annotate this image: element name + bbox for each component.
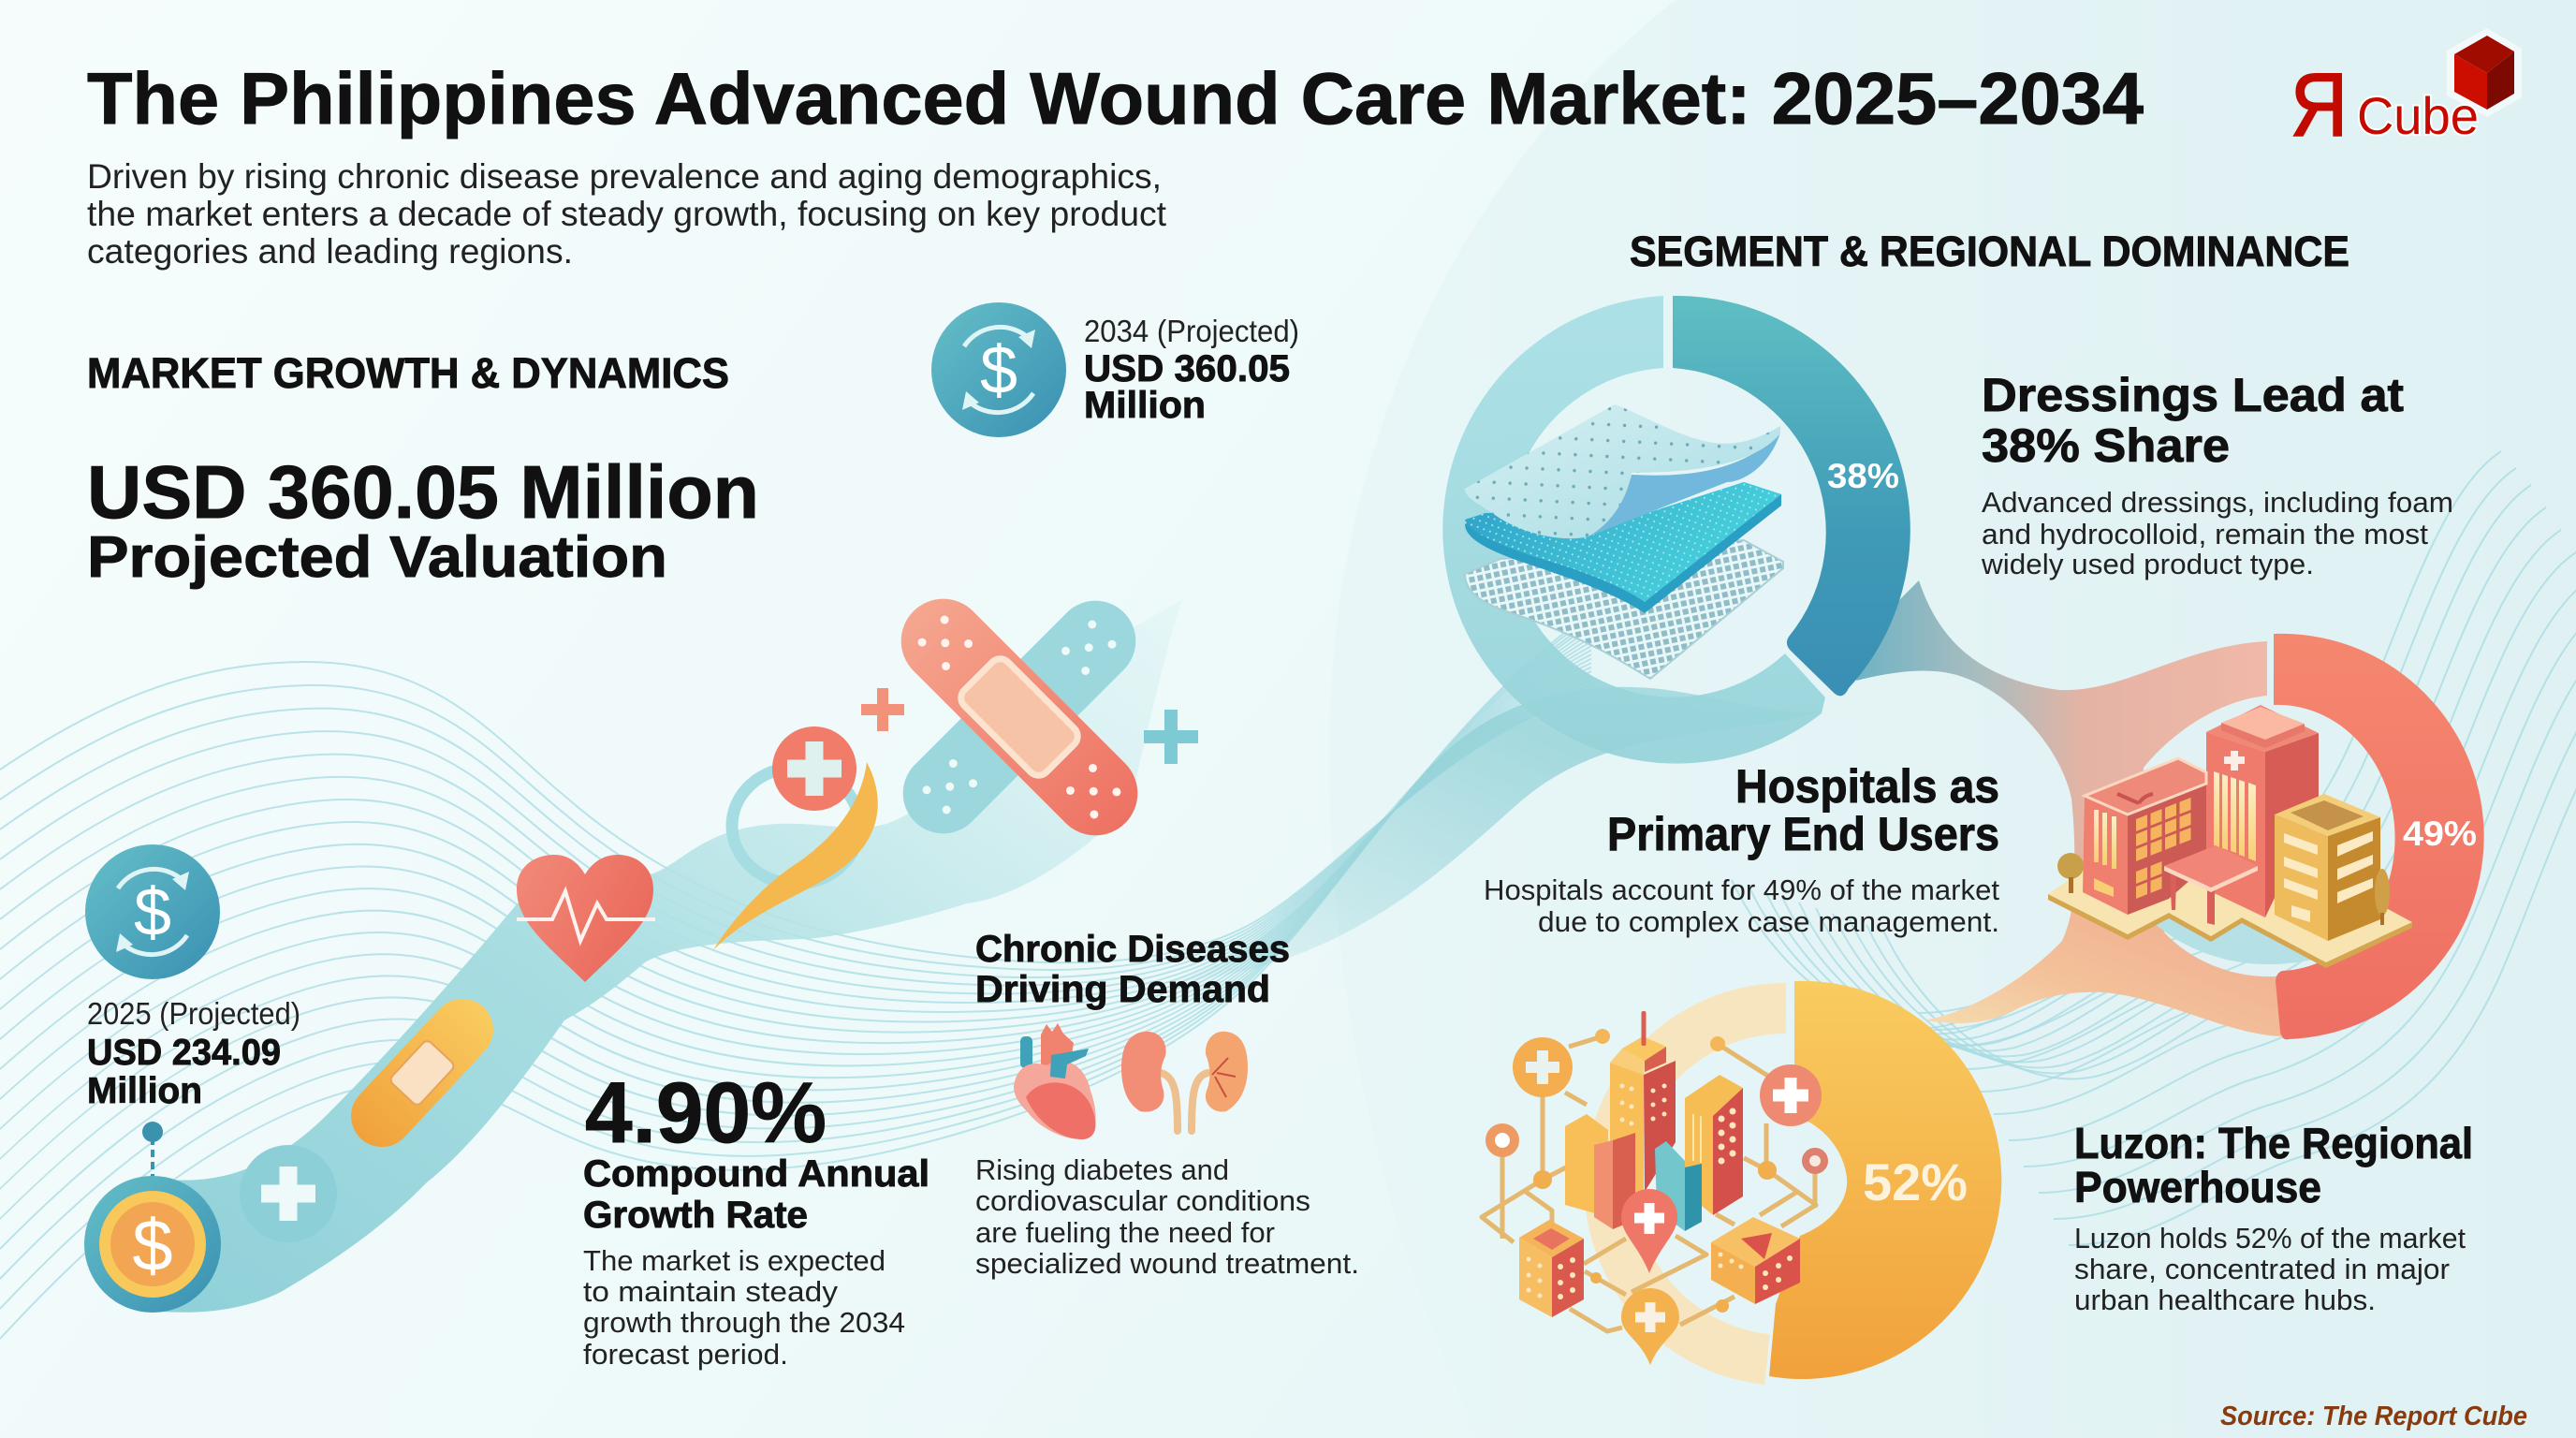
stat: 2034 projected: 2034 (Projected) bbox=[1084, 314, 1299, 348]
stat: 2025 projected: Million bbox=[87, 1071, 202, 1111]
text: chronic disease description: specialized wound treatment. bbox=[975, 1247, 1359, 1280]
chart: dressings 38 percent donut: 38% bbox=[1827, 457, 1899, 495]
icon: gold coin start marker bbox=[84, 1122, 221, 1313]
text: hospitals: Hospitals as bbox=[1735, 760, 1999, 813]
heading: chronic diseases bbox=[975, 929, 1290, 1010]
icon: dollar cycle 2034 bbox=[931, 302, 1066, 437]
icon: crossed bandages bbox=[884, 581, 1155, 853]
text: Luzon: Powerhouse bbox=[2074, 1163, 2321, 1211]
text: dressings: and hydrocolloid, remain the most bbox=[1982, 518, 2428, 550]
heading: chronic diseases: Chronic Diseases bbox=[975, 929, 1290, 970]
growth ribbon bbox=[153, 599, 1182, 1313]
icon: dollar cycle 2025: $ bbox=[134, 875, 171, 950]
text: chronic disease description: Rising diabetes and bbox=[975, 1153, 1229, 1186]
text: chronic disease description: are fueling the need for bbox=[975, 1216, 1275, 1249]
stat: CAGR: Compound Annual bbox=[583, 1153, 929, 1195]
heading: chronic diseases: Driving Demand bbox=[975, 969, 1270, 1010]
ribbon: hospitals to Luzon bbox=[1925, 889, 2281, 1036]
text: hospitals: Primary End Users bbox=[1607, 808, 1999, 860]
icon: kidneys bbox=[1121, 1032, 1248, 1131]
logo: RCube bbox=[2291, 28, 2522, 155]
subtitle text block: the market enters a decade of steady growth, focusing on key product bbox=[87, 195, 1167, 233]
stat: CAGR: forecast period. bbox=[583, 1338, 788, 1371]
chart: hospitals 49 percent donut bbox=[2153, 634, 2484, 1039]
stat: 2034 projected bbox=[1084, 314, 1299, 426]
icon: layered wound dressings bbox=[1465, 404, 1783, 679]
logo: RCube: Cube bbox=[2357, 86, 2479, 145]
text: Luzon: Luzon: The Regional bbox=[2074, 1119, 2473, 1167]
icon: orange plus bbox=[861, 688, 904, 731]
icon: orange leaf swoosh bbox=[713, 762, 878, 950]
source note: Source: The Report Cube bbox=[2220, 1401, 2527, 1431]
text: hospitals bbox=[1484, 760, 1999, 938]
text: dressings: Advanced dressings, including foam bbox=[1982, 486, 2453, 519]
heading: market growth and dynamics: MARKET GROWTH & DYNAMICS bbox=[87, 349, 729, 397]
stat: CAGR: to maintain steady bbox=[583, 1275, 839, 1308]
stat: 2034 projected: Million bbox=[1084, 385, 1206, 426]
icon: plus circle bbox=[240, 1145, 337, 1242]
text: hospitals: due to complex case management. bbox=[1538, 905, 1999, 938]
icon: heart with pulse bbox=[517, 855, 655, 982]
heading: segment and regional dominance: SEGMENT & REGIONAL DOMINANCE bbox=[1630, 227, 2349, 275]
icon: gold coin start marker: $ bbox=[132, 1204, 173, 1286]
stat: CAGR: growth through the 2034 bbox=[583, 1306, 905, 1339]
stat: CAGR: Growth Rate bbox=[583, 1195, 808, 1236]
chart: Luzon 52 percent donut bbox=[1609, 981, 2001, 1379]
ribbon: dressings to hospitals bbox=[1856, 580, 2267, 899]
stat: 2034 projected: USD 360.05 bbox=[1084, 348, 1290, 389]
teal wave into dressings donut bbox=[1161, 687, 1821, 983]
icon: dollar cycle 2034: $ bbox=[980, 333, 1017, 408]
chart: Luzon 52 percent donut: 52% bbox=[1863, 1152, 1968, 1211]
stat: 2025 projected bbox=[87, 996, 300, 1111]
text: Luzon: Luzon holds 52% of the market bbox=[2074, 1222, 2466, 1255]
text: hospitals: Hospitals account for 49% of the market bbox=[1484, 873, 1999, 906]
icon: urban healthcare network bbox=[1482, 1011, 1824, 1365]
icon: dollar cycle 2025 bbox=[85, 844, 220, 979]
text: chronic disease description bbox=[975, 1153, 1359, 1280]
chart: hospitals 49 percent donut: 49% bbox=[2403, 814, 2477, 853]
subtitle text block bbox=[87, 157, 1167, 271]
icon: teal plus bbox=[1144, 710, 1198, 764]
text: dressings: 38% Share bbox=[1982, 419, 2230, 472]
text: dressings: widely used product type. bbox=[1981, 548, 2314, 580]
headline valuation: Projected Valuation bbox=[87, 525, 667, 590]
text: dressings bbox=[1981, 369, 2453, 580]
subtitle text block: Driven by rising chronic disease prevalence and aging demographics, bbox=[87, 157, 1162, 196]
icon: hospital buildings bbox=[2048, 705, 2412, 968]
logo: RCube: Я bbox=[2291, 55, 2348, 155]
icon: human heart organ bbox=[1014, 1023, 1096, 1139]
subtitle text block: categories and leading regions. bbox=[87, 232, 573, 271]
headline valuation: USD 360.05 Million bbox=[87, 450, 759, 534]
stat: CAGR: 4.90% bbox=[585, 1065, 827, 1161]
icon: teal ring and medical cross bbox=[732, 726, 859, 884]
text: Luzon: urban healthcare hubs. bbox=[2074, 1284, 2376, 1316]
headline valuation bbox=[87, 450, 759, 590]
icon: orange bandage bbox=[338, 986, 506, 1160]
title: The Philippines Advanced Wound Care Market: 2025–2034 bbox=[87, 57, 2144, 139]
text: Luzon: share, concentrated in major bbox=[2074, 1253, 2450, 1285]
text: chronic disease description: cordiovascular conditions bbox=[975, 1184, 1310, 1217]
stat: 2025 projected: USD 234.09 bbox=[87, 1033, 281, 1073]
stat: 2025 projected: 2025 (Projected) bbox=[87, 996, 300, 1031]
text: Luzon bbox=[2074, 1119, 2473, 1316]
chart: dressings 38 percent donut bbox=[1442, 296, 1910, 764]
text: dressings: Dressings Lead at bbox=[1982, 369, 2404, 421]
stat: CAGR: The market is expected bbox=[583, 1244, 886, 1277]
stat: CAGR bbox=[583, 1065, 929, 1371]
